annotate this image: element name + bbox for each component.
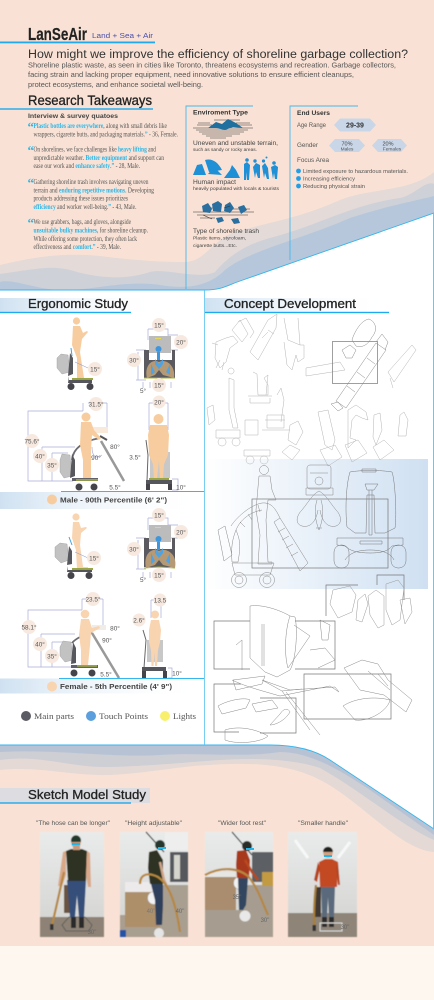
male side view, hose: 80°	[110, 443, 120, 451]
male side view, step: 15°	[90, 366, 100, 374]
heading: sketch model study: Sketch Model Study	[28, 787, 147, 802]
heading: concept development: Concept Development	[224, 296, 356, 311]
female front view	[132, 594, 182, 678]
sketch: small carts	[207, 368, 290, 464]
quote 3: efficiency and worker well-being.” - 43, Male.	[34, 202, 137, 211]
male front view: 10°	[176, 484, 186, 492]
quote 2: unpredictable weather. Better equipment and support can	[34, 153, 164, 162]
male side view, hose: 90°	[91, 454, 101, 462]
legend: Touch Points	[99, 712, 148, 721]
quote 3	[28, 175, 154, 211]
female side view, hose: 35°	[47, 652, 57, 660]
quote 2: On shorelines, we face challenges like heavy lifting and	[34, 144, 156, 154]
female top view: 15°	[154, 512, 164, 520]
male side view, hose: 40°	[35, 452, 45, 460]
legend: Main parts	[34, 712, 74, 721]
intro paragraph: facing strain and lacking proper equipment, need innovative solutions to ensure efficient cleanups,	[28, 70, 354, 79]
text: terrain	[193, 140, 278, 152]
female top view	[127, 508, 188, 584]
female top view: 5°	[140, 576, 146, 584]
gender: Gender	[297, 143, 318, 149]
photo captions: "Wider foot rest"	[218, 821, 266, 827]
heading: concept development	[205, 296, 390, 313]
legend	[21, 711, 196, 721]
icon: terrain	[193, 119, 253, 138]
photo captions: "Smaller handle"	[298, 821, 348, 827]
male side view, hose: 35°	[47, 462, 57, 470]
top waves	[0, 172, 434, 300]
text: shoreline trash: Plastic items, styrofoam,	[193, 236, 246, 240]
quote 3: “	[28, 175, 34, 190]
intro paragraph	[28, 60, 396, 89]
panel: ergonomic study	[0, 296, 204, 721]
quote 4: While offering some protection, they often lack	[34, 234, 137, 243]
sketch: seats	[214, 660, 412, 743]
quote 1: wrappers, cigarette butts, and packaging materials.” - 36, Female.	[34, 130, 178, 138]
quote 2: “	[28, 142, 34, 158]
icon: trash	[193, 201, 254, 224]
heading: environment type: Enviroment Type	[193, 110, 248, 116]
gender: 70%	[341, 142, 353, 148]
age range: 29-39	[346, 122, 364, 130]
quote 3: products addressing these issues prioritizes	[34, 194, 128, 202]
intro paragraph: protect ecosystems, and enhance societal well-being.	[28, 80, 203, 89]
female front view: 10°	[172, 670, 182, 678]
photo captions	[36, 821, 348, 827]
photo captions: "Height adjustable"	[125, 821, 182, 827]
question heading: How might we improve the efficiency of shoreline garbage collection?	[28, 47, 408, 61]
heading: research takeaways: Research Takeaways	[28, 93, 152, 108]
photo 1	[40, 832, 104, 937]
bottom waves	[0, 700, 434, 852]
sketch: hand and arm studies	[212, 314, 345, 376]
photo 2: 40"	[176, 909, 184, 915]
female front view: 2.6°	[133, 616, 145, 624]
heading: ergonomic study: Ergonomic Study	[28, 296, 129, 311]
male side view, hose: 5.5°	[109, 484, 121, 492]
icon: people	[193, 156, 278, 180]
concept highlight band	[205, 459, 428, 589]
female side view, hose: 40°	[35, 640, 45, 648]
male top view: 15°	[154, 382, 164, 390]
sketch: cart with hose	[218, 466, 388, 588]
quote 4: effectiveness and comfort.” - 39, Male.	[34, 242, 121, 251]
female percentile band: Female - 5th Percentile (4' 9")	[60, 684, 172, 691]
male top view: 15°	[154, 322, 164, 330]
photo 3: 35"	[233, 895, 241, 901]
male front view: 3.5°	[129, 454, 141, 462]
male side view, hose: 31.5°	[88, 400, 104, 408]
photo 2: 40"	[147, 909, 155, 915]
female top view: 20°	[176, 528, 186, 536]
text: shoreline trash	[193, 228, 260, 248]
male front view: 20°	[154, 398, 164, 406]
male top view: 5°	[140, 387, 146, 395]
text: terrain: such as sandy or rocky areas.	[193, 147, 257, 152]
text: human impact: heavily populated with locals & tourists	[193, 186, 280, 191]
male percentile band: Male - 90th Percentile (6' 2")	[60, 498, 167, 504]
quote 1: “	[28, 119, 34, 134]
gender	[297, 139, 407, 152]
quote 4: “	[28, 215, 34, 230]
female front view: 13.5	[154, 598, 167, 604]
text: shoreline trash: cigarette butts...Etc.	[193, 243, 237, 248]
male top view: 20°	[176, 338, 186, 346]
text: human impact	[193, 179, 280, 191]
photo captions: "The hose can be longer"	[36, 821, 110, 827]
age range	[297, 118, 376, 132]
text: human impact: Human impact	[193, 179, 236, 186]
photo 1: 30"	[88, 930, 96, 936]
intro paragraph: Shoreline plastic waste, as seen in cities like Toronto, threatens ecosystems and recreation. Garbage collectors,	[28, 60, 396, 70]
photo 3	[205, 832, 273, 937]
female side view, hose	[22, 592, 120, 678]
sketch: front view machine	[334, 469, 406, 568]
panel: environment type	[186, 106, 280, 289]
quote 2: ease our work and enhance safety.” - 28, Male.	[34, 161, 140, 170]
age range: Age Range	[297, 123, 327, 129]
gender: 20%	[382, 142, 394, 148]
heading: end users: End Users	[297, 110, 330, 117]
photo 3: 30"	[261, 918, 269, 924]
heading: ergonomic study	[0, 296, 160, 313]
female side view, hose: 90°	[102, 636, 112, 644]
male top view	[127, 318, 188, 395]
sketch: handle models	[282, 405, 408, 466]
quote 2	[28, 142, 164, 170]
male percentile band	[0, 491, 204, 509]
quote 3: terrain and enduring repetitive motions. Developing	[34, 186, 154, 194]
female side view, hose: 58.1°	[22, 624, 37, 632]
panel: concept development	[205, 296, 416, 743]
female top view: 15°	[154, 572, 164, 580]
white middle panel	[0, 213, 434, 829]
female side view, hose: 80°	[110, 624, 120, 632]
male top view: 30°	[129, 356, 139, 364]
panel divider	[204, 213, 434, 829]
panel: research takeaways	[0, 93, 178, 251]
female top view: 30°	[129, 546, 139, 554]
panel: end users	[290, 106, 408, 260]
heading: sketch model study	[0, 787, 150, 804]
focus list: Limited exposure to hazardous materials.	[303, 169, 408, 175]
title	[0, 24, 155, 44]
focus list: Increasing efficiency	[303, 176, 355, 182]
photo 4	[288, 832, 357, 937]
male front view	[129, 396, 186, 492]
photo 4: 30"	[341, 925, 349, 931]
focus area: Focus Area	[297, 158, 330, 164]
female side view, hose: 23.5°	[86, 596, 101, 604]
sketch: backpack	[214, 606, 335, 677]
text: terrain: Uneven and unstable terrain,	[193, 140, 278, 147]
photo 2	[120, 832, 188, 938]
male side view, hose	[24, 397, 124, 492]
female percentile band	[0, 678, 204, 694]
quote 4	[28, 215, 148, 251]
sketch: boxed tube and seat	[331, 319, 416, 411]
female side view, step	[55, 513, 101, 579]
male side view, step	[57, 317, 102, 390]
bottom cream strip	[0, 946, 434, 1000]
male side view, hose: 75.6°	[24, 438, 40, 446]
sketch: top-down machine	[297, 465, 340, 530]
gender: Females	[383, 146, 402, 152]
title: LanSeAir	[28, 24, 87, 44]
gender: Males	[341, 146, 354, 152]
quote 4: unsuitable bulky machines, for shoreline cleanup.	[34, 226, 148, 234]
quote 1: Plastic bottles are everywhere, along with small debris like	[34, 121, 168, 130]
subheading: Interview & survey quatoes	[28, 113, 118, 120]
title: Land + Sea + Air	[92, 31, 154, 40]
focus list	[296, 169, 408, 190]
female side view, step: 15°	[89, 554, 99, 562]
focus list: Reducing physical strain	[303, 184, 365, 190]
female side view, hose: 5.5°	[100, 670, 112, 678]
quote 4: We use grabbers, bags, and gloves, alongside	[34, 217, 132, 226]
legend: Lights	[173, 712, 196, 721]
quote 3: Gathering shoreline trash involves navigating uneven	[34, 177, 149, 186]
text: shoreline trash: Type of shoreline trash	[193, 228, 260, 235]
quote 1	[28, 119, 178, 138]
sketch: bags	[326, 575, 412, 628]
